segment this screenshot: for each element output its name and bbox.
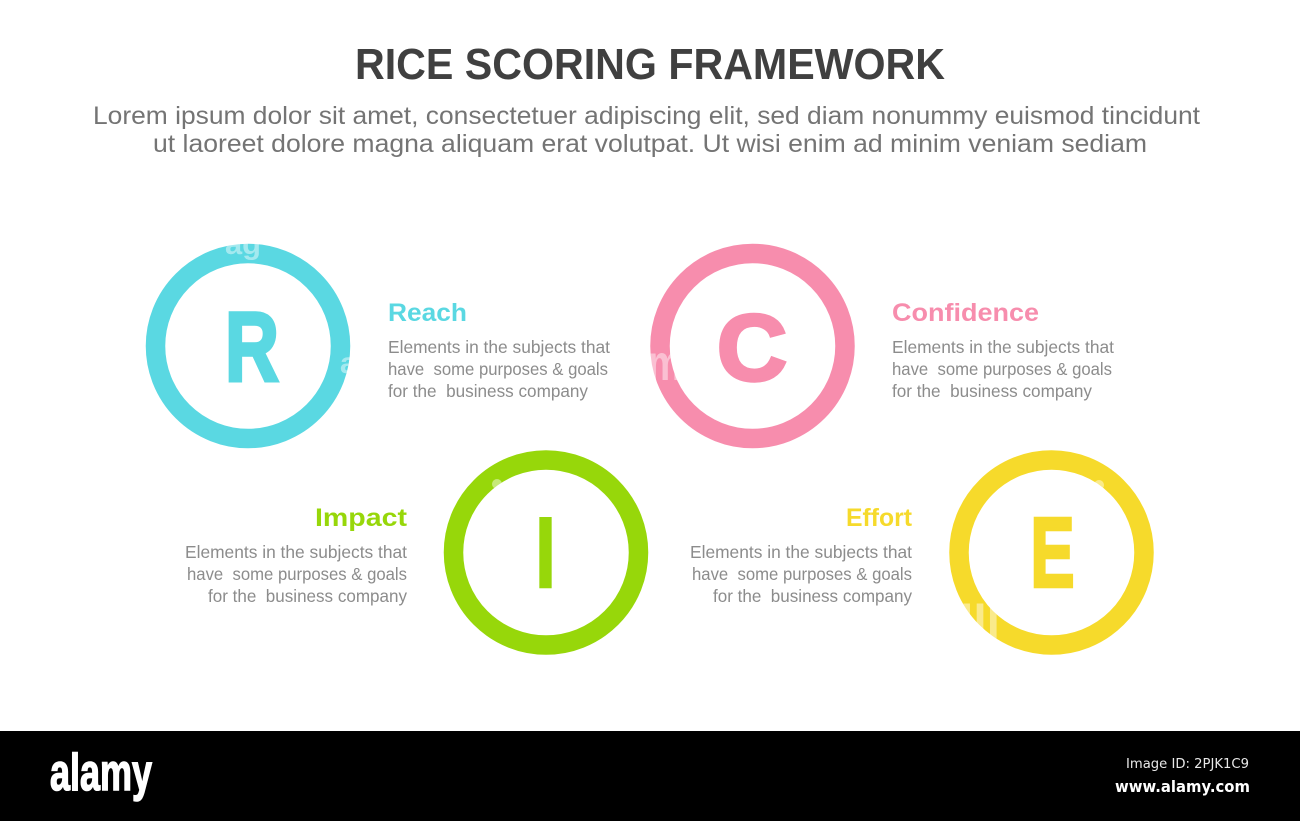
heading: impact: Impact — [315, 504, 408, 532]
text block: confidence — [892, 337, 1114, 401]
text block: effort — [690, 542, 912, 606]
text block: effort: Elements in the subjects that — [690, 542, 912, 562]
icon: E ring — [959, 460, 1144, 645]
panel: impact — [185, 460, 638, 645]
text block: effort: have some purposes & goals — [692, 564, 912, 584]
text block: impact: for the business company — [208, 586, 407, 606]
icon: R ring: R — [225, 291, 279, 401]
logo: alamy: alamy — [50, 744, 152, 802]
subtitle text — [93, 102, 1200, 158]
heading: effort: Effort — [846, 504, 913, 532]
image id: Image ID: 2PJK1C9 — [1126, 756, 1249, 772]
text block: confidence: Elements in the subjects that — [892, 337, 1114, 357]
heading: confidence: Confidence — [892, 299, 1039, 327]
text block: reach: have some purposes & goals — [388, 359, 608, 379]
panel: effort — [690, 460, 1144, 645]
stock watermark remnants: m — [648, 335, 682, 391]
text block: reach: Elements in the subjects that — [388, 337, 610, 357]
subtitle text: Lorem ipsum dolor sit amet, consectetuer adipiscing elit, sed diam nonummy euismod tincidunt — [93, 102, 1200, 130]
title: RICE SCORING FRAMEWORK — [355, 40, 945, 89]
text block: reach — [388, 337, 610, 401]
subtitle text: ut laoreet dolore magna aliquam erat volutpat. Ut wisi enim ad minim veniam sediam — [153, 130, 1147, 158]
heading: reach: Reach — [388, 299, 467, 327]
text block: reach: for the business company — [388, 381, 588, 401]
icon: I ring: I — [536, 497, 555, 607]
website: www.alamy.com — [1115, 777, 1250, 796]
panel: reach — [156, 254, 610, 438]
text block: confidence: have some purposes & goals — [892, 359, 1112, 379]
footer band — [0, 731, 1300, 821]
icon: I ring — [454, 460, 638, 645]
text block: impact — [185, 542, 407, 606]
icon: C ring: C — [717, 295, 787, 400]
icon: E ring: E — [1030, 497, 1074, 607]
icon: C ring — [660, 254, 845, 438]
stock watermark remnants: lll — [960, 595, 1000, 651]
text block: confidence: for the business company — [892, 381, 1092, 401]
icon: R ring — [156, 254, 340, 438]
text block: effort: for the business company — [713, 586, 912, 606]
text block: impact: Elements in the subjects that — [185, 542, 407, 562]
stock watermark remnants — [225, 228, 1104, 651]
stock watermark remnants: ag — [225, 228, 261, 261]
panel: confidence — [660, 254, 1114, 438]
stock watermark remnants: a — [340, 347, 357, 380]
text block: impact: have some purposes & goals — [187, 564, 407, 584]
